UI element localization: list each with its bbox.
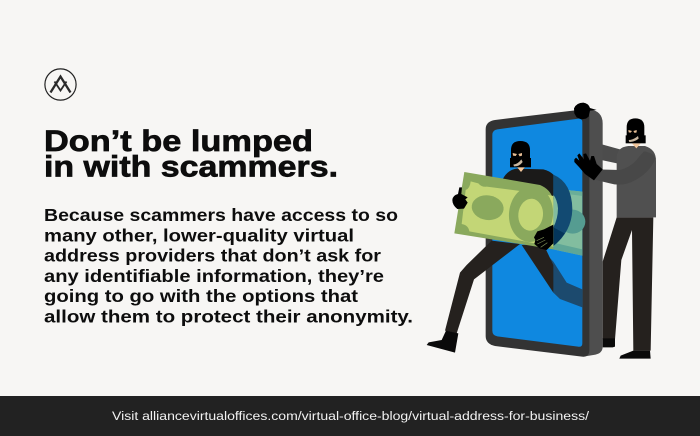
footer link text: Visit alliancevirtualoffices.com/virtual-office-blog/virtual-address-for-business/ [112, 409, 590, 423]
banknote seen through phone screen [553, 189, 585, 256]
body text block: many other, lower-quality virtual [44, 225, 354, 245]
icon: hand on top of phone [574, 103, 597, 119]
banknote [454, 172, 556, 249]
figure: scammer carrying banknote [427, 141, 553, 353]
icon: company logo [45, 69, 76, 100]
figure: second scammer behind phone [598, 118, 656, 359]
title: in with scammers. [44, 150, 338, 184]
torso and leg seen through phone screen [549, 175, 582, 307]
footer bar [0, 396, 700, 436]
body text block: any identifiable information, they’re [44, 266, 384, 286]
icon: balaclava head [510, 141, 531, 167]
body text block [44, 205, 413, 326]
front arm of second scammer [593, 151, 656, 185]
phone [486, 109, 603, 357]
body text block: allow them to protect their anonymity. [44, 306, 413, 326]
title: Don’t be lumped [44, 125, 313, 158]
icon: gloved hand on phone side [574, 153, 603, 180]
body text block: Because scammers have access to so [44, 205, 398, 225]
body text block: address providers that don’t ask for [44, 246, 381, 266]
body text block: going to go with the options that [44, 286, 358, 306]
title [44, 125, 338, 184]
illustration: scammers pulling money out of a phone [427, 103, 656, 359]
icon: gloved hand left [452, 187, 468, 209]
icon: gloved hand right [534, 225, 553, 250]
icon: balaclava head [626, 118, 646, 143]
